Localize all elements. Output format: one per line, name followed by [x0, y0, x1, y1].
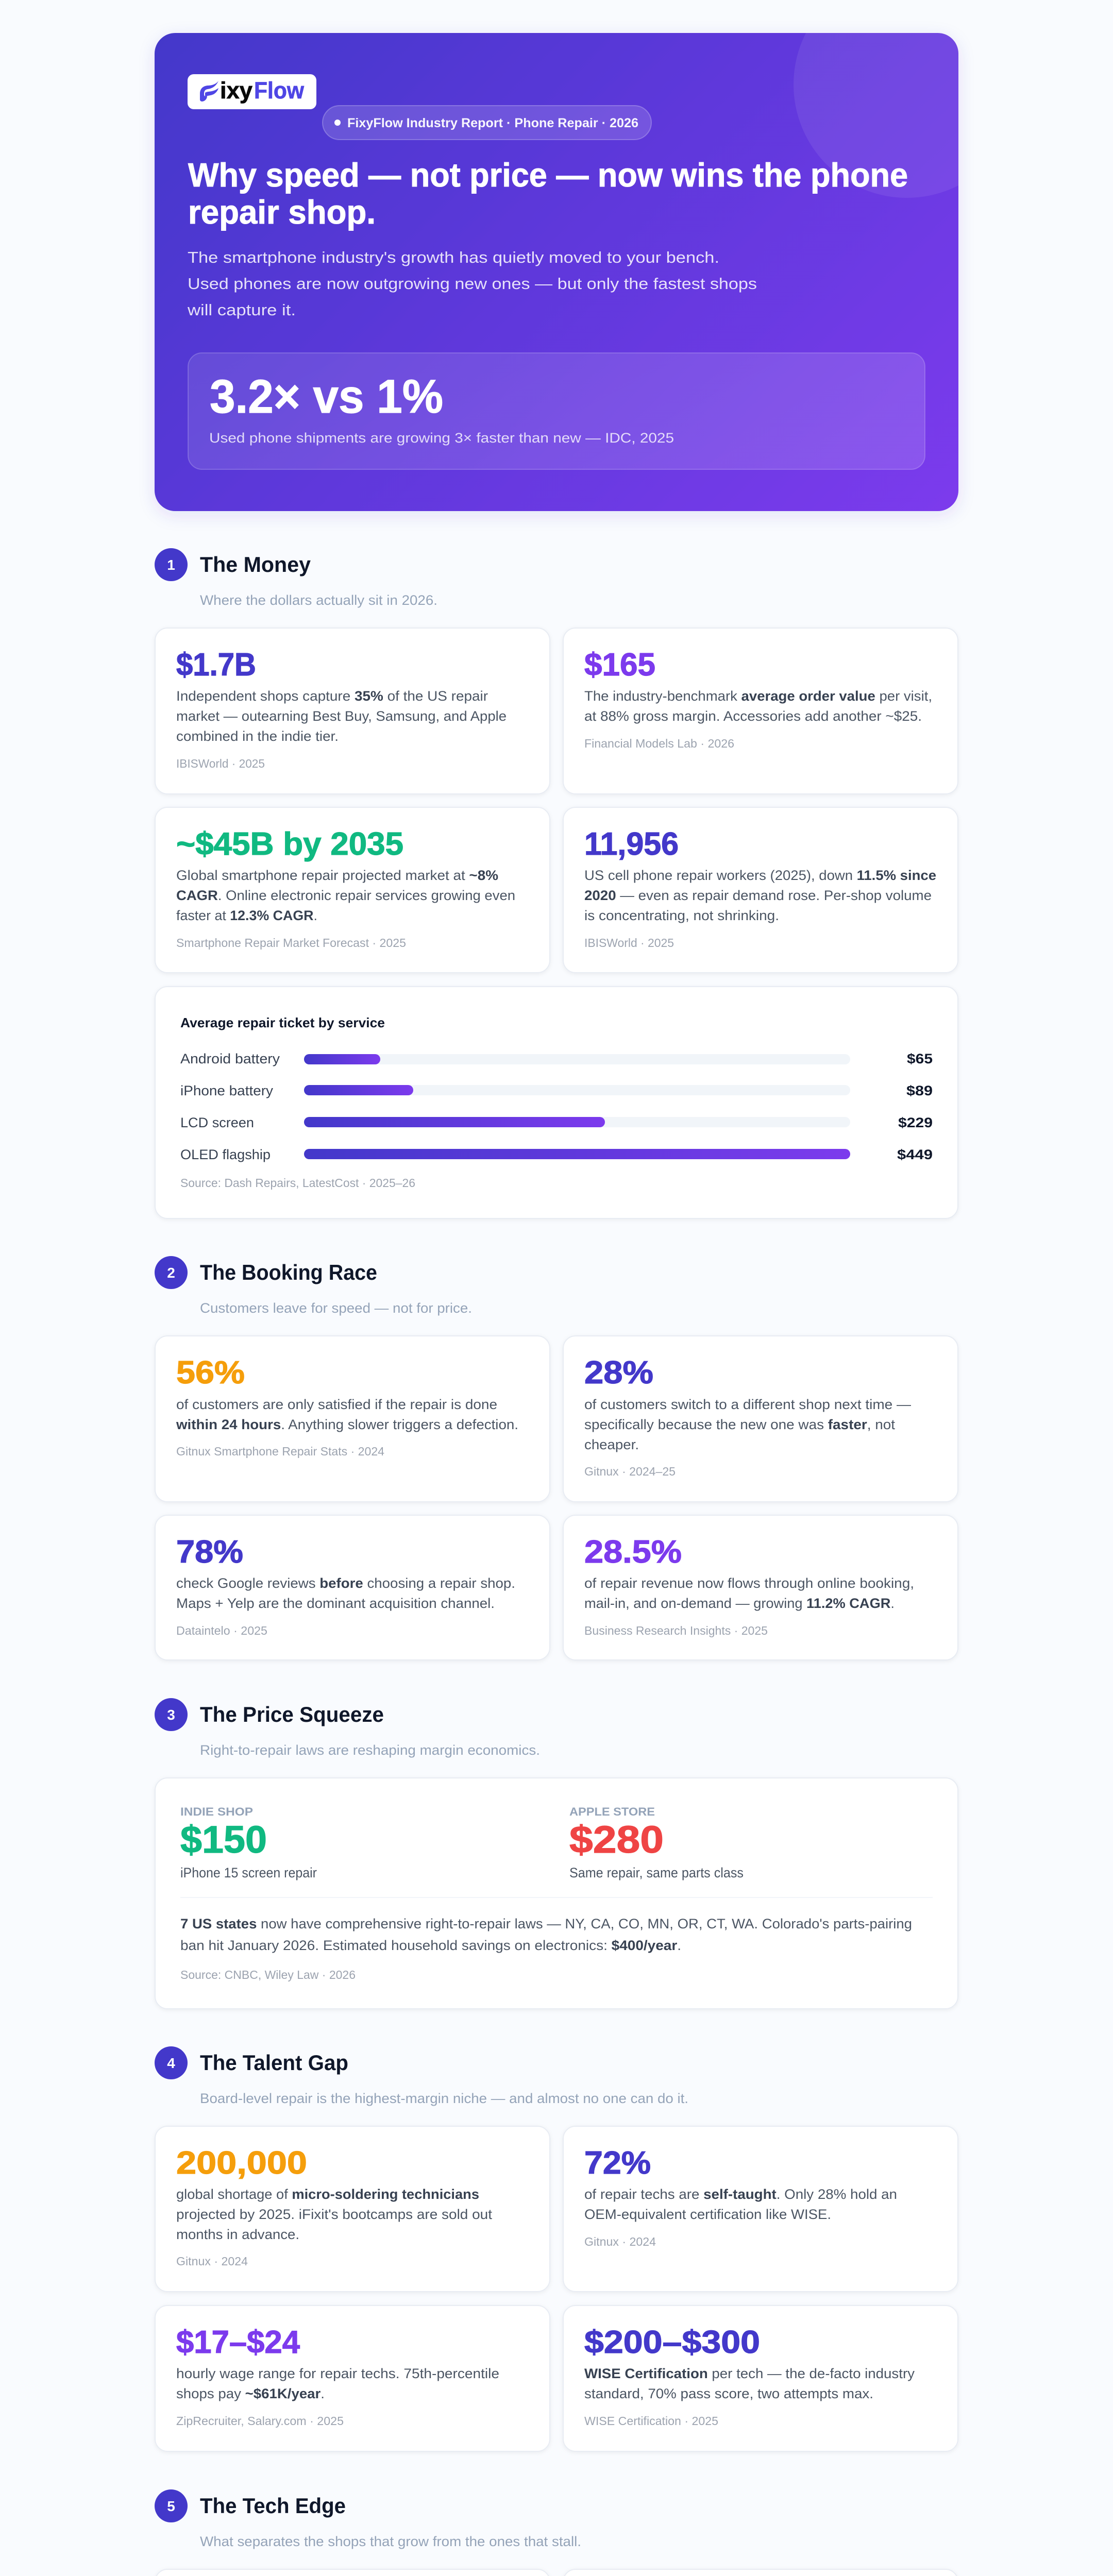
logo: FixyFlow: ixy [220, 77, 252, 104]
bar: Android battery [180, 1051, 933, 1066]
card: 72%: 72% [584, 2145, 651, 2181]
bar: OLED flagship: OLED flagship [180, 1147, 271, 1162]
section heading: 3 The Price Squeeze: Right-to-repair laws are reshaping margin economics. [200, 1742, 540, 1758]
card: $17–$24: $17–$24 [176, 2325, 300, 2360]
card: $1.7B: IBISWorld · 2025 [176, 757, 265, 770]
card: 78% [155, 1515, 550, 1660]
card: $17–$24: shops pay ~$61K/year. [176, 2386, 325, 2401]
card: ~$45B by 2035: CAGR. Online electronic repair services growing even [176, 888, 515, 903]
bar: iPhone battery: $89 [906, 1083, 933, 1098]
card: 72%: of repair techs are self-taught. Only 28% hold an [584, 2187, 897, 2202]
card: $200–$300: standard, 70% pass score, two attempts max. [584, 2386, 873, 2401]
card: $17–$24: hourly wage range for repair techs. 75th-percentile [176, 2366, 499, 2381]
card: $200–$300: $200–$300 [584, 2325, 760, 2360]
indie shop price: iPhone 15 screen repair [180, 1865, 317, 1880]
card: 72%: OEM-equivalent certification like WISE. [584, 2207, 831, 2222]
card: 28.5%: mail-in, and on-demand — growing 11.2% CAGR. [584, 1596, 895, 1611]
hero intro text: The smartphone industry's growth has quietly moved to your bench. [188, 248, 719, 266]
badge: report label [323, 106, 651, 140]
card: 28% [563, 1336, 958, 1502]
section heading: 4 The Talent Gap [155, 2046, 688, 2106]
card: ~$45B by 2035: ~$45B by 2035 [176, 826, 403, 862]
card: 200,000: global shortage of micro-soldering technicians [176, 2187, 479, 2202]
section heading: 5 The Tech Edge: What separates the shops that grow from the ones that stall. [200, 2534, 581, 2549]
panel: price comparison [155, 1778, 958, 2009]
card: 56%: of customers are only satisfied if the repair is done [176, 1397, 497, 1412]
card: 56% [155, 1336, 550, 1502]
card: 28%: specifically because the new one was faster, not [584, 1417, 896, 1432]
card: $1.7B: combined in the indie tier. [176, 728, 339, 744]
card: ~$45B by 2035: Global smartphone repair projected market at ~8% [176, 868, 498, 883]
card: 78%: 78% [176, 1534, 243, 1570]
card: +30% [155, 2569, 550, 2576]
card: 78%: Dataintelo · 2025 [176, 1624, 267, 1637]
card: 11,956: 11,956 [584, 826, 679, 862]
section heading: 4 The Talent Gap: Board-level repair is the highest-margin niche — and almost no one can do it. [200, 2091, 688, 2106]
card: 28%: cheaper. [584, 1437, 639, 1452]
card: 11,956: US cell phone repair workers (2025), down 11.5% since [584, 868, 936, 883]
card: $1.7B: Independent shops capture 35% of the US repair [176, 688, 488, 704]
card: $200–$300 [563, 2306, 958, 2451]
card: 28.5%: 28.5% [584, 1534, 682, 1570]
card: 28.5% [563, 1515, 958, 1660]
section heading: 2 The Booking Race: Customers leave for speed — not for price. [200, 1300, 472, 1316]
card: $17–$24 [155, 2306, 550, 2451]
section heading: 4 The Talent Gap: 4 [167, 2055, 175, 2071]
card: 28%: 28% [584, 1355, 653, 1391]
title: Why speed — not price — now wins the phone [188, 156, 908, 194]
badge: report label: FixyFlow Industry Report · Phone Repair · 2026 [347, 116, 638, 130]
card: $165 [563, 628, 958, 794]
card: 12 → 3.5 min [563, 2569, 958, 2576]
card: 56%: Gitnux Smartphone Repair Stats · 2024 [176, 1445, 384, 1458]
card: ~$45B by 2035: Smartphone Repair Market Forecast · 2025 [176, 936, 406, 950]
title: repair shop. [188, 193, 376, 231]
bar: OLED flagship: $449 [897, 1147, 933, 1162]
section heading: 4 The Talent Gap: The Talent Gap [200, 2050, 348, 2075]
section heading: 5 The Tech Edge: The Tech Edge [200, 2494, 346, 2518]
hero intro text [187, 248, 757, 319]
card: ~$45B by 2035: faster at 12.3% CAGR. [176, 908, 317, 923]
card: $1.7B [155, 628, 550, 794]
section heading: 2 The Booking Race [155, 1256, 472, 1316]
panel: hero [149, 32, 964, 520]
chart: average repair ticket by service [155, 987, 958, 1218]
chart: average repair ticket by service: Source: Dash Repairs, LatestCost · 2025–26 [180, 1176, 415, 1190]
hero intro text: Used phones are now outgrowing new ones — but only the fastest shops [188, 275, 757, 293]
hero stat box [188, 353, 925, 469]
bar: LCD screen: LCD screen [180, 1115, 254, 1130]
card: $165: The industry-benchmark average order value per visit, [584, 688, 932, 704]
chart: average repair ticket by service: Average repair ticket by service [180, 1015, 385, 1030]
section heading: 2 The Booking Race: The Booking Race [200, 1260, 377, 1284]
card: 78%: Maps + Yelp are the dominant acquisition channel. [176, 1596, 495, 1611]
indie shop price: INDIE SHOP [180, 1805, 253, 1818]
card: $1.7B: market — outearning Best Buy, Samsung, and Apple [176, 708, 507, 724]
right-to-repair note: ban hit January 2026. Estimated household savings on electronics: $400/year. [180, 1938, 681, 1953]
section heading: 2 The Booking Race: 2 [167, 1265, 175, 1281]
card: 200,000 [155, 2126, 550, 2292]
bar: Android battery: Android battery [180, 1051, 280, 1066]
card: 200,000: 200,000 [176, 2145, 307, 2181]
card: 28%: of customers switch to a different shop next time — [584, 1397, 911, 1412]
section heading: 5 The Tech Edge [155, 2489, 581, 2549]
right-to-repair note [180, 1916, 912, 1981]
indie shop price: $150 [180, 1818, 267, 1861]
apple store price: Same repair, same parts class [569, 1865, 744, 1880]
title [188, 156, 908, 231]
apple store price: APPLE STORE [569, 1805, 655, 1818]
section heading: 3 The Price Squeeze: 3 [167, 1707, 175, 1723]
bar: Android battery: $65 [907, 1051, 933, 1066]
hero intro text: will capture it. [187, 301, 296, 319]
section heading: 1 The Money: The Money [200, 552, 311, 577]
section heading: 1 The Money: 1 [167, 557, 175, 573]
card: 11,956: is concentrating, not shrinking. [584, 908, 779, 923]
section heading: 1 The Money [155, 548, 437, 608]
card: 28.5%: Business Research Insights · 2025 [584, 1624, 768, 1637]
card: ~$45B by 2035 [155, 807, 550, 973]
right-to-repair note: 7 US states now have comprehensive right-to-repair laws — NY, CA, CO, MN, OR, CT, WA. Colorado's parts-pairing [180, 1916, 912, 1931]
card: 200,000: months in advance. [176, 2227, 299, 2242]
card: 72%: Gitnux · 2024 [584, 2235, 656, 2248]
section heading: 3 The Price Squeeze: The Price Squeeze [200, 1702, 384, 1726]
card: 28%: Gitnux · 2024–25 [584, 1465, 676, 1478]
bar: iPhone battery: iPhone battery [180, 1083, 274, 1098]
card: 11,956: 2020 — even as repair demand rose. Per-shop volume [584, 888, 932, 903]
section heading: 1 The Money: Where the dollars actually sit in 2026. [200, 592, 437, 608]
card: 28.5%: of repair revenue now flows through online booking, [584, 1575, 914, 1591]
card: 56%: within 24 hours. Anything slower triggers a defection. [176, 1417, 518, 1432]
right-to-repair note: Source: CNBC, Wiley Law · 2026 [180, 1968, 356, 1981]
section heading: 5 The Tech Edge: 5 [167, 2498, 175, 2514]
card: $1.7B: $1.7B [176, 647, 256, 683]
bar: LCD screen [180, 1115, 933, 1130]
logo: FixyFlow [188, 74, 316, 109]
card: 56%: 56% [176, 1355, 245, 1391]
bar: LCD screen: $229 [898, 1115, 933, 1130]
indie shop price [180, 1805, 317, 1880]
card: $165: $165 [584, 647, 655, 683]
apple store price: $280 [569, 1818, 664, 1861]
card: $200–$300: WISE Certification per tech — the de-facto industry [584, 2366, 915, 2381]
bar: OLED flagship [180, 1147, 933, 1162]
card: $165: Financial Models Lab · 2026 [584, 737, 734, 750]
card: $165: at 88% gross margin. Accessories add another ~$25. [584, 708, 922, 724]
card: 200,000: projected by 2025. iFixit's bootcamps are sold out [176, 2207, 493, 2222]
card: 11,956 [563, 807, 958, 973]
card: 200,000: Gitnux · 2024 [176, 2255, 248, 2268]
hero stat box: 3.2× vs 1% [210, 370, 443, 423]
section heading: 3 The Price Squeeze [155, 1698, 540, 1758]
card: $200–$300: WISE Certification · 2025 [584, 2414, 718, 2428]
hero stat box: Used phone shipments are growing 3× faster than new — IDC, 2025 [209, 430, 674, 446]
card: 11,956: IBISWorld · 2025 [584, 936, 674, 950]
card: 72% [563, 2126, 958, 2292]
bar: iPhone battery [180, 1083, 933, 1098]
apple store price [569, 1805, 744, 1880]
card: $17–$24: ZipRecruiter, Salary.com · 2025 [176, 2414, 344, 2428]
card: 78%: check Google reviews before choosing a repair shop. [176, 1575, 515, 1591]
logo: FixyFlow: Flow [254, 77, 305, 104]
